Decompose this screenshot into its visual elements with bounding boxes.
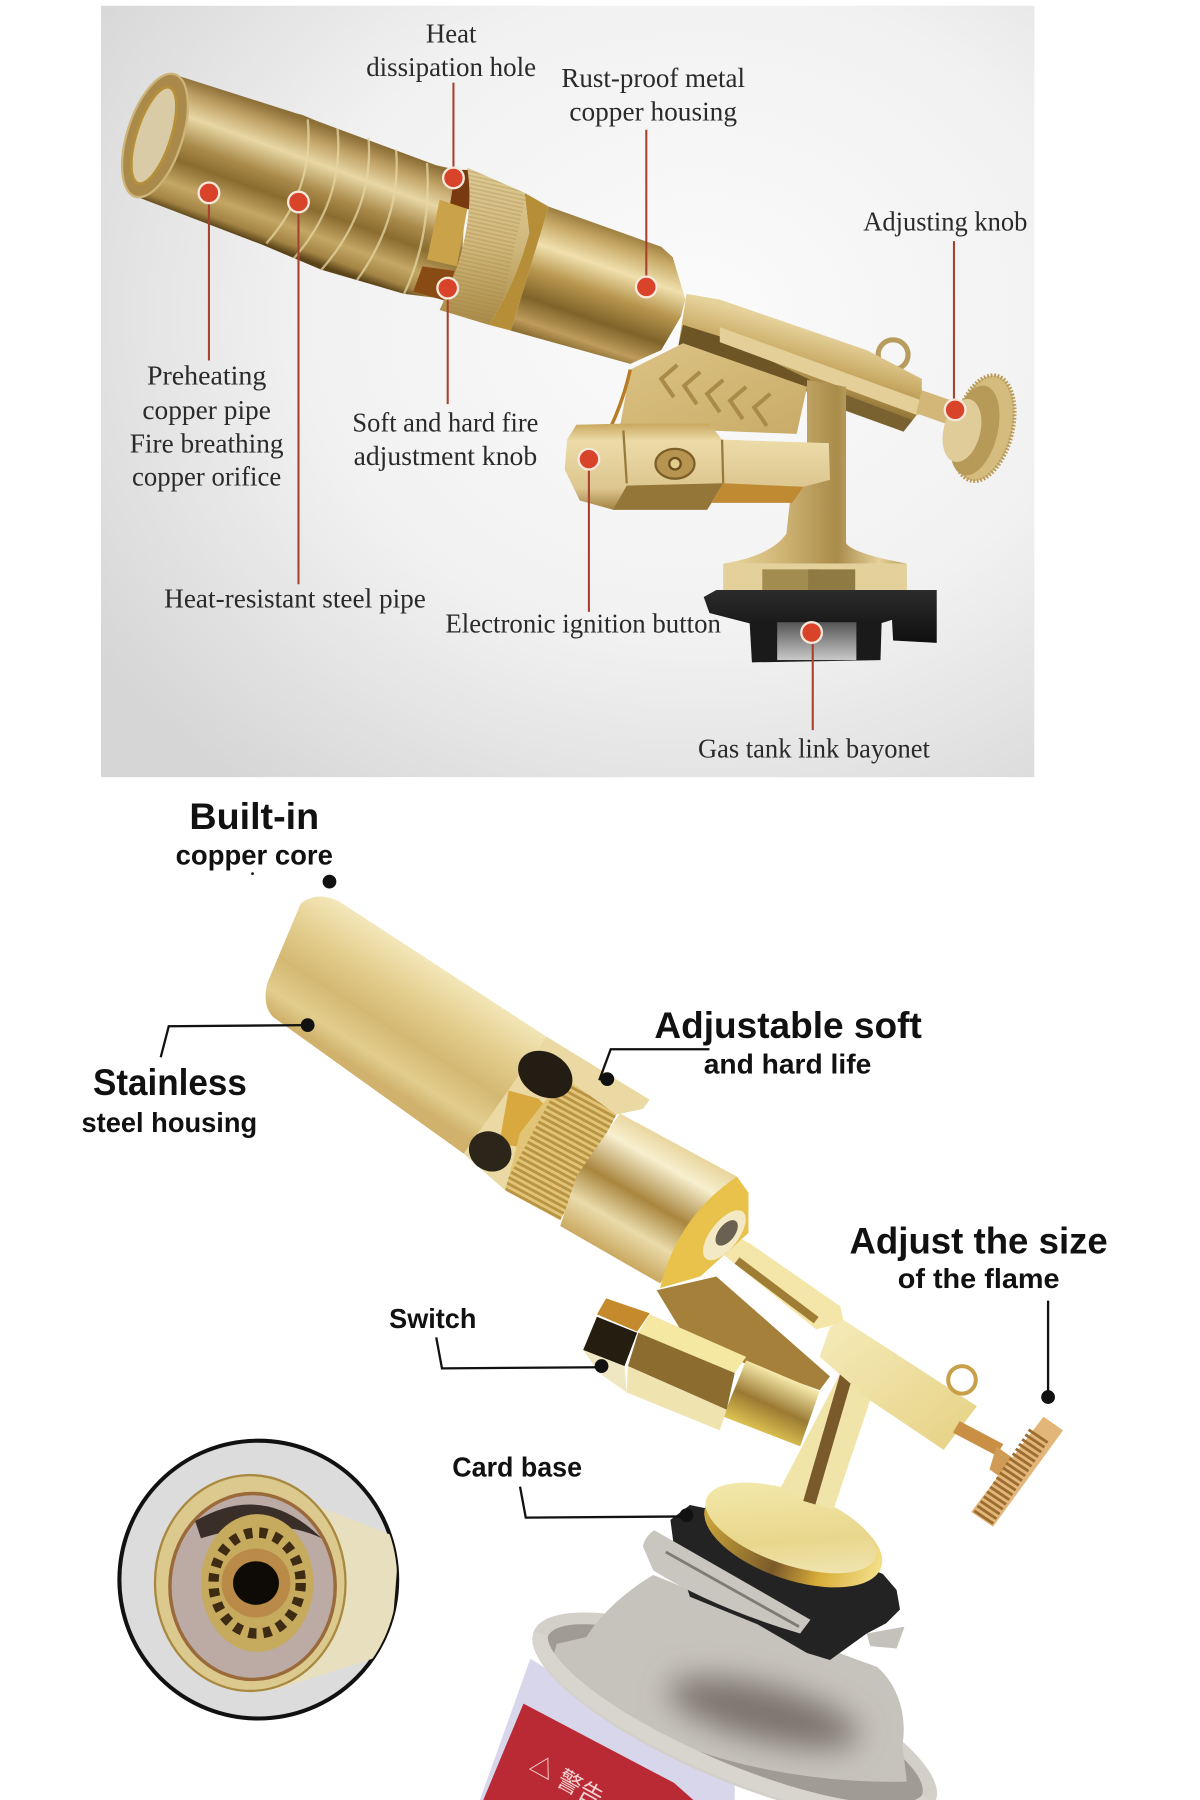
- red warning label: [483, 1704, 693, 1800]
- can body label band: [480, 1659, 735, 1800]
- label: gas tank link bayonet: Gas tank link bayonet: [698, 733, 930, 764]
- adjusting knob: [936, 369, 1025, 487]
- callout dots: [199, 168, 965, 643]
- thread band: [489, 193, 549, 331]
- T stem: [779, 1373, 870, 1510]
- label: preheating copper pipe, fire breathing copper orifice: copper orifice: [132, 461, 281, 492]
- label: soft and hard fire adjustment knob: adjustment knob: [354, 440, 537, 471]
- label: stainless steel housing: steel housing: [82, 1107, 257, 1138]
- vent holes: [462, 1041, 581, 1179]
- front tube: [266, 896, 546, 1154]
- collar ring: [643, 1530, 905, 1648]
- rod light strip: [720, 327, 925, 416]
- label: rust-proof metal copper housing: copper housing: [569, 96, 737, 127]
- callout dots: [251, 872, 1055, 1522]
- label: preheating copper pipe, fire breathing copper orifice: Preheating: [147, 360, 267, 391]
- label: electronic ignition button: Electronic ignition button: [445, 608, 721, 639]
- label: soft and hard fire adjustment knob: Soft and hard fire: [352, 407, 538, 438]
- can rim front: [540, 1634, 929, 1800]
- label: adjust the size of the flame: Adjust the size: [849, 1221, 1108, 1262]
- label: heat dissipation hole: dissipation hole: [366, 51, 536, 82]
- nozzle mouth: [109, 66, 201, 205]
- inset: nozzle close-up: [119, 1441, 399, 1718]
- label: adjust the size of the flame: of the flame: [898, 1263, 1060, 1294]
- main tube front: [135, 75, 467, 301]
- label: rust-proof metal copper housing: Rust-proof metal: [561, 62, 745, 93]
- tube cone: [660, 1177, 754, 1288]
- label: built-in copper core: copper core: [176, 839, 333, 870]
- can dome: [554, 1575, 907, 1782]
- heat dissipation openings: [413, 170, 472, 301]
- label: adjusting knob: Adjusting knob: [863, 206, 1027, 237]
- callout leaders: [161, 1025, 1048, 1518]
- rod: [714, 1228, 844, 1329]
- chevron plate: [657, 1277, 830, 1390]
- adjuster bar: [820, 1320, 977, 1450]
- switch hex body: [627, 1314, 746, 1430]
- knurled ring: [440, 168, 529, 327]
- switch end cap: [583, 1298, 650, 1392]
- label: adjustable soft and hard life: and hard life: [704, 1048, 871, 1079]
- gas can: [480, 1575, 937, 1800]
- tube ribs: [266, 119, 428, 294]
- callout lines: [209, 83, 954, 730]
- rod dark face: [678, 325, 810, 390]
- rear tube: [511, 207, 685, 364]
- label: switch: Switch: [389, 1303, 476, 1334]
- black bayonet: [704, 590, 937, 662]
- panel background: [101, 6, 1034, 777]
- can inner: [528, 1590, 941, 1800]
- torch illustration: [109, 66, 1025, 662]
- label: heat-resistant steel pipe: Heat-resistant steel pipe: [164, 582, 426, 613]
- stem shaft: [953, 1421, 1003, 1456]
- chevron plate: [611, 343, 807, 434]
- base disc: [691, 1464, 895, 1608]
- label: card base: Card base: [452, 1451, 582, 1482]
- knurled flame knob: [971, 1417, 1063, 1527]
- knurled collar: [505, 1077, 616, 1220]
- label: built-in copper core: Built-in: [189, 796, 319, 837]
- switch cylinder: [723, 1360, 820, 1446]
- vertical stem: [723, 380, 907, 564]
- label: heat dissipation hole: Heat: [426, 17, 477, 48]
- can rim back: [509, 1572, 961, 1800]
- gold thread: [499, 1091, 558, 1151]
- loop ring: [948, 1366, 976, 1394]
- stem shaft: [916, 390, 962, 427]
- panel: annotated torch diagram: [101, 6, 1034, 777]
- octagon base: [723, 564, 907, 597]
- ignition housing: [565, 424, 830, 510]
- label: adjustable soft and hard life: Adjustable soft: [654, 1005, 922, 1046]
- label: preheating copper pipe, fire breathing copper orifice: Fire breathing: [130, 427, 284, 458]
- rear tube: [560, 1114, 737, 1283]
- panel: torch on gas can: [82, 796, 1108, 1800]
- loop ring: [878, 340, 908, 370]
- adjuster rod: [678, 294, 922, 432]
- label: preheating copper pipe, fire breathing copper orifice: copper pipe: [142, 394, 271, 425]
- threaded sleeve: [464, 1037, 650, 1190]
- black gasket: [670, 1505, 900, 1660]
- label: stainless steel housing: Stainless: [93, 1062, 247, 1103]
- rod end face: [821, 390, 913, 432]
